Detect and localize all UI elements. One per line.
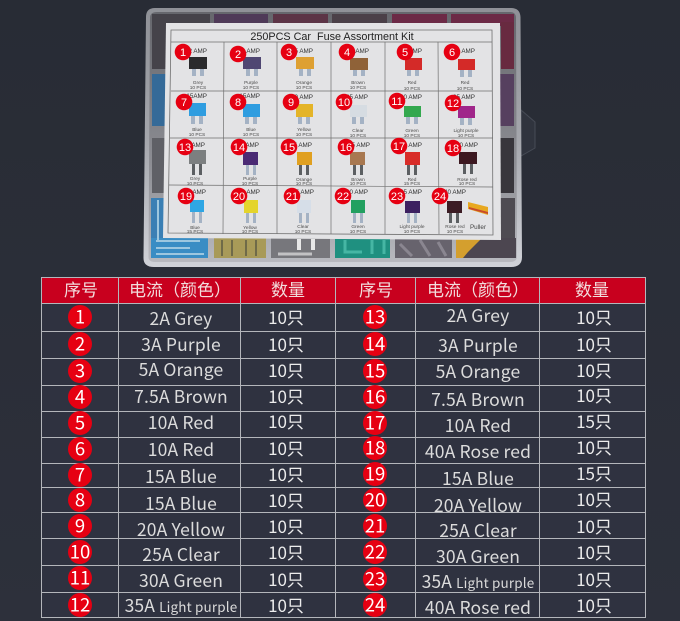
card labels: Red <box>408 80 417 86</box>
card labels: 30 AMP <box>400 94 422 101</box>
left column rows: 9 <box>75 512 85 538</box>
numbered markers on card: 12 <box>447 98 459 110</box>
card labels: Purple <box>243 176 257 182</box>
numbered markers on card: 18 <box>447 143 459 155</box>
left column rows: 5 <box>75 410 85 436</box>
right column rows: 10只 <box>576 434 612 459</box>
card labels: 10 PCS <box>190 85 206 91</box>
card labels: 30 AMP <box>346 189 368 196</box>
left column rows: 5A Orange <box>139 357 223 382</box>
left column rows: 30A Green <box>139 568 223 593</box>
numbered markers on card: 22 <box>337 191 349 203</box>
right column rows: 7.5A Brown <box>431 387 525 412</box>
left column rows: 1 <box>75 304 85 330</box>
left column rows: 10只 <box>268 435 304 460</box>
left column rows: 10只 <box>268 566 304 591</box>
left column rows: 6 <box>75 436 85 462</box>
card labels: Light purple <box>399 224 425 230</box>
card labels: 5 AMP <box>293 142 312 149</box>
right column rows: 13 <box>365 304 385 330</box>
card labels: 15AMP <box>186 93 207 100</box>
card labels: Blue <box>246 127 256 133</box>
left column rows: 20A Yellow <box>137 517 225 542</box>
card labels: Yellow <box>243 225 257 231</box>
card labels: Puller <box>470 224 486 231</box>
card labels: Light purple <box>453 128 479 134</box>
right column rows: 35A Light purple <box>422 569 534 594</box>
left column rows: 10 <box>70 538 90 564</box>
right column rows: 20A Yellow <box>434 493 522 518</box>
numbered markers on card: 21 <box>286 191 298 203</box>
card labels: Blue <box>190 225 200 231</box>
numbered markers on card: 3 <box>286 47 292 59</box>
right column rows: 10只 <box>576 304 612 329</box>
numbered markers on card: 11 <box>391 96 403 108</box>
card labels: 10 PCS <box>242 229 258 235</box>
right column rows: 10只 <box>576 357 612 382</box>
kit instruction card <box>163 23 501 240</box>
card labels: 25 AMP <box>346 94 368 101</box>
left column rows: 10只 <box>268 592 304 617</box>
card labels: 15AMP <box>239 93 260 100</box>
card labels: 15 PCS <box>404 181 420 187</box>
numbered markers on card: 23 <box>391 191 403 203</box>
card labels: 10 AMP <box>400 48 422 55</box>
right column rows: 5A Orange <box>436 359 520 384</box>
right column rows: 18 <box>365 434 385 460</box>
left column rows: 2A Grey <box>150 306 212 331</box>
left column rows: 7.5A Brown <box>134 384 228 409</box>
numbered markers on card <box>175 44 461 204</box>
right column rows: 24 <box>365 592 385 618</box>
left column rows: 7 <box>75 462 85 488</box>
card labels: Green <box>351 224 365 230</box>
right column rows: 10A Red <box>445 413 511 438</box>
numbered markers on card: 1 <box>180 47 186 59</box>
right column rows: 40A Rose red <box>425 595 531 620</box>
card labels: 25 AMP <box>292 189 314 196</box>
card labels: Green <box>405 128 419 134</box>
card labels: 40 AMP <box>444 189 466 196</box>
numbered markers on card: 24 <box>434 191 446 203</box>
left column rows: 10只 <box>268 304 304 329</box>
right column rows: 15只 <box>576 460 612 485</box>
card labels: Orange <box>296 80 312 86</box>
fuses stored in tray compartments <box>151 14 516 258</box>
card labels: Clear <box>297 224 309 230</box>
table header: 序号 <box>359 276 393 301</box>
card labels: 35 AMP <box>400 189 422 196</box>
card labels: Orange <box>296 177 312 183</box>
left column rows: 11 <box>70 564 90 590</box>
left column rows: 10A Red <box>148 410 214 435</box>
card labels: Red <box>461 80 470 86</box>
card labels: 10 PCS <box>296 132 312 138</box>
table header <box>41 276 646 303</box>
card labels: Blue <box>192 127 202 133</box>
card labels: 3 AMP <box>240 142 259 149</box>
right column rows: 16 <box>365 384 385 410</box>
card labels: 10 PCS <box>404 229 420 235</box>
right column rows: 19 <box>365 460 385 486</box>
numbered markers on card: 8 <box>235 97 241 109</box>
left column rows: 8 <box>75 486 85 512</box>
right column rows: 10只 <box>576 566 612 591</box>
numbered markers on card: 9 <box>288 97 294 109</box>
right column rows: 10只 <box>576 382 612 407</box>
plastic tray <box>143 8 535 267</box>
left column rows: 15A Blue <box>145 491 217 516</box>
left column rows: 10只 <box>268 383 304 408</box>
card labels: 10 PCS <box>296 181 312 187</box>
table body background <box>41 303 646 618</box>
left column rows: 2 <box>75 330 85 356</box>
card labels: Red <box>408 177 417 183</box>
left column rows: 10只 <box>268 357 304 382</box>
right column rows: 10只 <box>576 486 612 511</box>
card labels: 10 PCS <box>350 229 366 235</box>
left column rows: 10只 <box>268 487 304 512</box>
card labels: Grey <box>193 80 204 86</box>
left column rows: 10只 <box>268 513 304 538</box>
numbered markers on card: 20 <box>233 191 245 203</box>
card labels: Grey <box>190 176 201 182</box>
icon: puller tool <box>468 202 488 215</box>
specification table <box>41 276 646 620</box>
card labels: Clear <box>352 128 364 134</box>
card labels: 10 AMP <box>453 48 475 55</box>
right column rows: 14 <box>365 330 385 356</box>
right column rows: 20 <box>365 486 385 512</box>
right column rows: 15只 <box>576 408 612 433</box>
card labels: Brown <box>351 80 365 86</box>
numbered markers on card: 17 <box>393 141 405 153</box>
left column rows: 3 <box>75 358 85 384</box>
numbered markers on card: 2 <box>235 49 241 61</box>
card labels: Purple <box>244 80 258 86</box>
right column rows: 15 <box>365 358 385 384</box>
card labels: 10 PCS <box>296 85 312 91</box>
table header: 电流（颜色） <box>427 276 529 301</box>
card labels: 7.5 AMP <box>345 48 369 55</box>
left column rows: 25A Clear <box>142 542 220 567</box>
card labels: 7.5 AMP <box>346 142 370 149</box>
fuses on card <box>189 57 477 223</box>
card labels: Yellow <box>297 127 311 133</box>
numbered markers on card: 7 <box>181 97 187 109</box>
card labels: 2 AMP <box>188 48 207 55</box>
card labels: 10 PCS <box>447 229 463 235</box>
left column rows: 3A Purple <box>141 332 221 357</box>
card labels: 20 AMP <box>238 189 260 196</box>
left column rows: 4 <box>75 384 85 410</box>
numbered markers on card: 19 <box>180 191 192 203</box>
card labels: 10 PCS <box>243 85 259 91</box>
card labels: Rose red <box>457 177 477 183</box>
left column rows: 10只 <box>268 539 304 564</box>
numbered markers on card: 13 <box>179 142 191 154</box>
left column rows: 10只 <box>268 408 304 433</box>
card labels: 10 PCS <box>350 85 366 91</box>
table header: 序号 <box>64 276 98 301</box>
card labels: 10 PCS <box>404 86 420 92</box>
right column rows: 25A Clear <box>439 518 517 543</box>
table header: 数量 <box>575 276 609 301</box>
table header: 电流（颜色） <box>129 276 231 301</box>
right column rows: 10只 <box>576 592 612 617</box>
right column rows: 30A Green <box>436 544 520 569</box>
right column rows: 2A Grey <box>447 303 509 328</box>
table header: 数量 <box>271 276 305 301</box>
numbered markers on card: 6 <box>449 47 455 59</box>
photo: fuse assortment box <box>143 8 535 267</box>
card labels: 10 PCS <box>457 86 473 92</box>
card labels: 10 PCS <box>242 181 258 187</box>
left column rows: 10只 <box>268 461 304 486</box>
card labels: 40 AMP <box>456 142 478 149</box>
card labels: 35 AMP <box>453 94 475 101</box>
right column rows <box>363 303 612 620</box>
card labels: 2 AMP <box>186 142 205 149</box>
card labels: 3 AMP <box>241 48 260 55</box>
card labels: 15 AMP <box>184 189 206 196</box>
left column rows: 10只 <box>268 331 304 356</box>
right column rows: 23 <box>365 566 385 592</box>
card labels: Brown <box>351 177 365 183</box>
numbered markers on card: 15 <box>283 142 295 154</box>
numbered markers on card: 4 <box>344 47 350 59</box>
card labels: 10 PCS <box>243 132 259 138</box>
right column rows: 10只 <box>576 331 612 356</box>
card labels: 10 PCS <box>350 133 366 139</box>
card labels: 10 PCS <box>459 181 475 187</box>
card labels: 10 AMP <box>400 142 422 149</box>
numbered markers on card: 14 <box>233 142 245 154</box>
table grid <box>41 277 646 618</box>
right column rows: 3A Purple <box>438 333 518 358</box>
numbered markers on card: 16 <box>340 142 352 154</box>
right column rows: 21 <box>365 512 385 538</box>
right column rows: 10只 <box>576 513 612 538</box>
right column rows: 40A Rose red <box>425 439 531 464</box>
card labels: 15 PCS <box>187 229 203 235</box>
card labels <box>184 48 486 235</box>
left column rows <box>68 304 304 618</box>
card labels: 10 PCS <box>458 133 474 139</box>
card labels: 10 PCS <box>350 181 366 187</box>
card labels: 5 AMP <box>294 48 313 55</box>
left column rows: 10A Red <box>148 437 214 462</box>
numbered markers on card: 10 <box>338 97 350 109</box>
right column rows: 22 <box>365 538 385 564</box>
right column rows: 15A Blue <box>442 466 514 491</box>
card labels: 20 AMP <box>291 94 313 101</box>
numbered markers on card: 5 <box>402 47 408 59</box>
card title: 250PCS Car Fuse Assortment Kit <box>250 31 414 43</box>
card labels: 10 PCS <box>187 181 203 187</box>
card labels: 10 PCS <box>295 229 311 235</box>
right column rows: 10只 <box>576 539 612 564</box>
right column rows: 17 <box>365 410 385 436</box>
left column rows: 12 <box>70 592 90 618</box>
card labels: 10 PCS <box>189 132 205 138</box>
left column rows: 15A Blue <box>145 464 217 489</box>
card labels: 10 PCS <box>404 133 420 139</box>
left column rows: 35A Light purple <box>125 593 237 618</box>
card labels: Rose red <box>445 224 465 230</box>
